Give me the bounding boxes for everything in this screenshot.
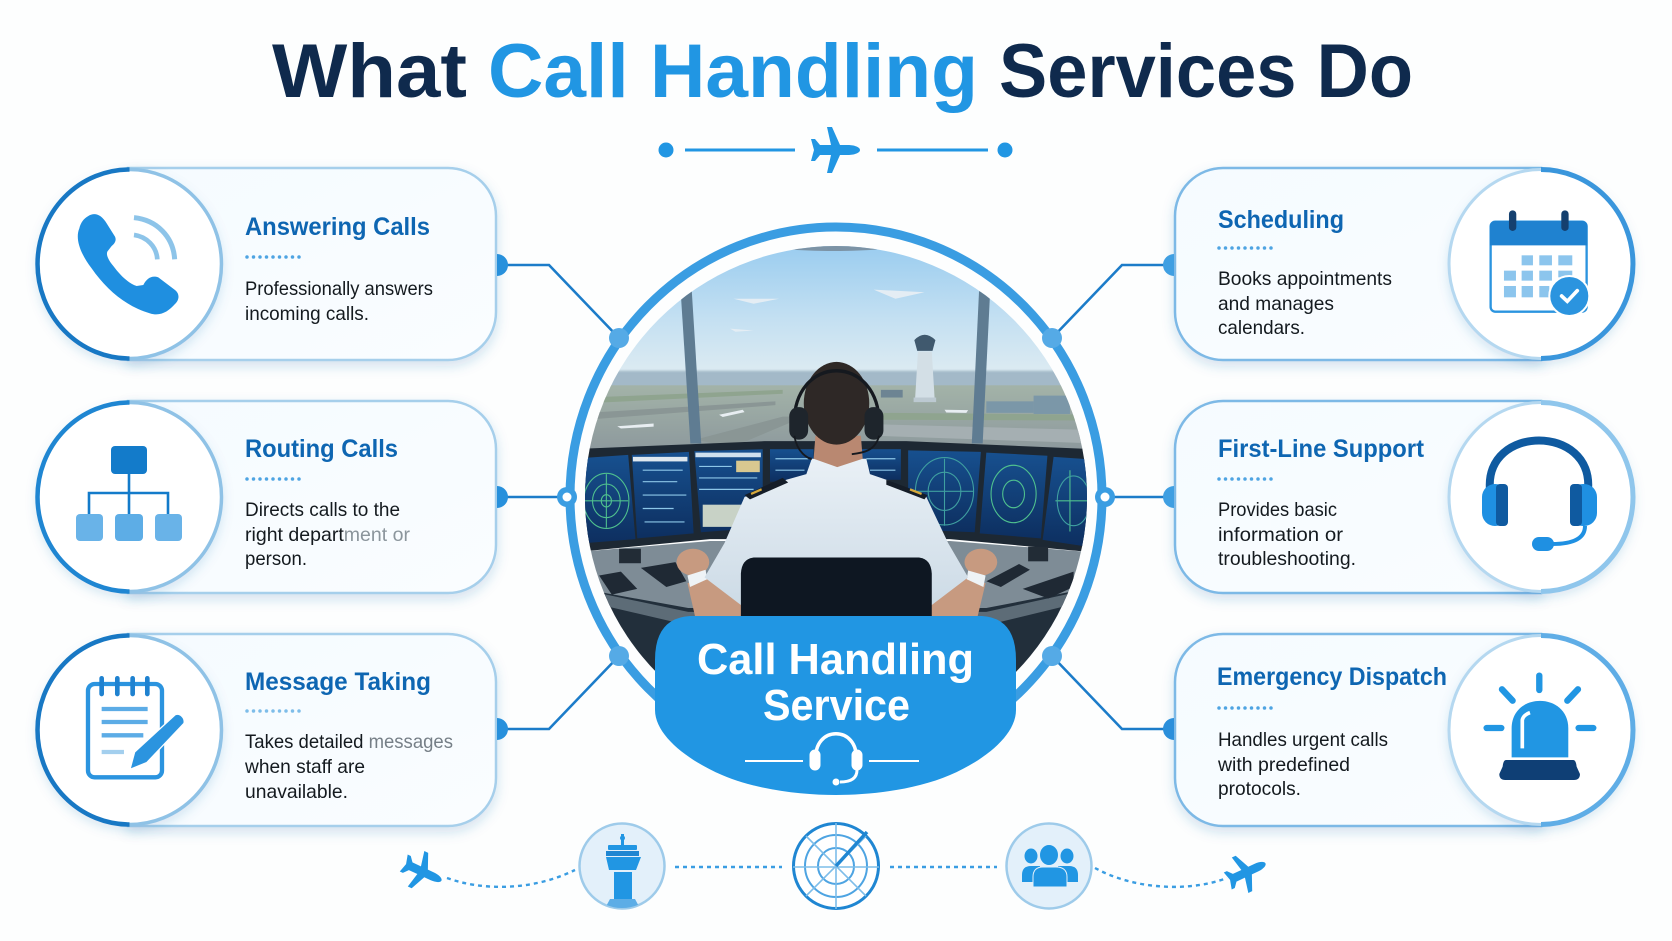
icon ring (38, 636, 222, 824)
dotted rule (247, 255, 305, 259)
operator shirt (705, 459, 968, 605)
description: right department or (245, 524, 411, 546)
description (245, 278, 433, 325)
dotted rule (1219, 706, 1275, 710)
desk (591, 541, 1081, 608)
card: Message Taking (38, 634, 508, 826)
description: Professionally answers (245, 278, 433, 300)
connector lines (496, 265, 1175, 729)
dotted rule (1219, 246, 1275, 250)
title: Services Do (999, 29, 1413, 114)
airfield ground (589, 385, 1083, 450)
icon ring (38, 402, 222, 592)
runway strips (598, 390, 1081, 443)
heading: Scheduling (1218, 206, 1344, 234)
description (244, 731, 453, 803)
desk front (604, 592, 1068, 672)
description: Books appointments (1218, 268, 1392, 290)
ring nodes (557, 328, 1115, 666)
icon: siren (1487, 676, 1593, 780)
icon: routing tree (76, 446, 182, 541)
description: information or (1218, 524, 1344, 546)
description: Takes detailed messages (245, 731, 453, 753)
icon: phone (78, 214, 178, 314)
heading: Emergency Dispatch (1217, 663, 1447, 691)
heading: First-Line Support (1218, 435, 1425, 463)
description: with predefined (1217, 754, 1350, 776)
monitor data graphics (633, 453, 895, 527)
dotted rule (1219, 477, 1275, 481)
title: Call Handling (488, 29, 978, 114)
banner headset icon (745, 734, 919, 785)
horizon haze (610, 370, 1062, 388)
chair (741, 557, 932, 619)
card body (1175, 401, 1541, 593)
connector tab (1163, 718, 1174, 740)
keyboards (599, 562, 1074, 598)
banner label: Call Handling (697, 635, 974, 684)
window pillars (681, 291, 701, 443)
epaulettes (745, 478, 927, 499)
icon: right plane (1219, 846, 1274, 899)
card body (1175, 634, 1541, 826)
description: when staff are (244, 756, 365, 778)
heading: Answering Calls (245, 213, 430, 241)
description: and manages (1218, 293, 1334, 315)
description: unavailable. (245, 781, 348, 803)
icon: radar badge (793, 823, 879, 909)
wrist bands (687, 570, 986, 587)
central photo: control tower operator (585, 246, 1087, 672)
heading: Message Taking (245, 668, 431, 696)
outer ring (570, 227, 1102, 767)
heading: Routing Calls (245, 435, 398, 463)
card: Emergency Dispatch (1163, 634, 1633, 826)
icon: people badge (1006, 824, 1092, 908)
card: Scheduling (1163, 168, 1633, 360)
operator forearms and hands (677, 549, 997, 618)
card: Answering Calls (38, 168, 508, 360)
desk edge (604, 594, 1068, 622)
bottom dotted route (447, 867, 1227, 887)
connector tab (497, 254, 508, 276)
description: person. (245, 548, 307, 570)
card body (128, 401, 496, 593)
parked aircraft (617, 410, 968, 429)
card: First-Line Support (1163, 401, 1633, 593)
banner label second line: Service (763, 681, 910, 730)
sky (618, 246, 1054, 372)
icon ring (1449, 636, 1633, 824)
card body (1175, 168, 1541, 360)
connector tab (497, 486, 508, 508)
description (1218, 268, 1392, 339)
connector tab (1163, 254, 1174, 276)
description (1218, 499, 1356, 570)
airport buildings (881, 390, 1070, 414)
icon: calendar (1490, 214, 1589, 316)
monitor bank (572, 441, 1095, 553)
description: Handles urgent calls (1218, 729, 1388, 751)
title (272, 29, 1413, 114)
connector tab (497, 718, 508, 740)
description: Directs calls to the (245, 499, 400, 521)
distant planes (730, 290, 925, 332)
description (245, 499, 411, 570)
dotted rule (247, 709, 305, 713)
title divider with plane icon (658, 127, 1012, 173)
card body (128, 634, 496, 826)
description: Provides basic (1218, 499, 1337, 521)
card: Routing Calls (38, 401, 508, 593)
icon ring (1449, 170, 1633, 358)
neck (814, 436, 863, 467)
icon: left plane (395, 845, 450, 898)
icon: notepad and pencil (88, 678, 184, 777)
dotted rule (247, 477, 305, 481)
center banner (655, 616, 1016, 795)
mic boom (794, 436, 879, 459)
distant control tower (914, 335, 936, 402)
description: incoming calls. (245, 303, 369, 325)
hair (804, 362, 869, 445)
monitor stands (619, 547, 1048, 563)
description: calendars. (1218, 317, 1305, 339)
monitors (583, 449, 1092, 547)
icon: headset (1482, 440, 1597, 551)
description: troubleshooting. (1218, 548, 1356, 570)
ear cups (789, 407, 883, 440)
card body (128, 168, 496, 360)
ceiling edge (792, 246, 878, 251)
title: What (272, 29, 467, 114)
description: protocols. (1218, 778, 1301, 800)
icon ring (1449, 402, 1633, 592)
icon: control tower badge (580, 824, 664, 912)
description (1217, 729, 1388, 800)
icon ring (38, 170, 222, 358)
headset band (794, 369, 880, 408)
connector tab (1163, 486, 1174, 508)
monitor radar graphics (584, 458, 1090, 531)
